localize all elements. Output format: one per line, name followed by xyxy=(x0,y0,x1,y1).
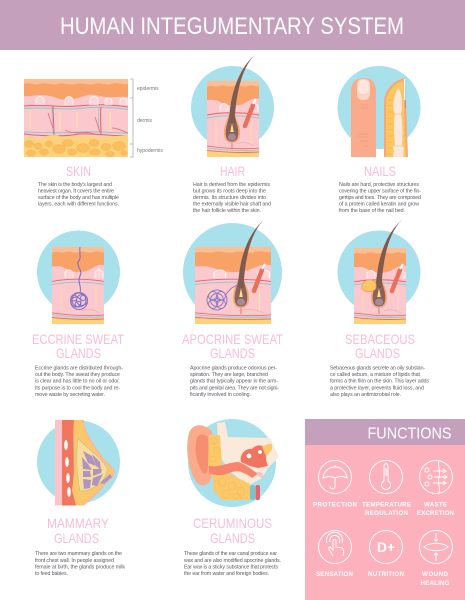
text: mammary glands xyxy=(35,551,125,577)
heading: ceruminous glands xyxy=(193,515,272,546)
text: skin: heaviest organ. It covers the entire xyxy=(38,188,114,194)
text: nails: of a protein called keratin and grow xyxy=(339,202,419,208)
text: ceruminous glands xyxy=(184,551,281,577)
heading: ceruminous glands: GLANDS xyxy=(210,530,255,546)
text: eccrine sweat glands: Eccrine glands are distributed through- xyxy=(35,366,123,372)
text: apocrine sweat glands: ficantly involved in cooling. xyxy=(190,392,251,398)
text: hair: but grows its roots deep into the xyxy=(193,188,266,194)
heading: eccrine sweat glands: GLANDS xyxy=(56,345,101,361)
icon: sensation xyxy=(318,530,352,564)
panel: skin xyxy=(24,79,163,208)
heading: eccrine sweat glands: ECCRINE SWEAT xyxy=(32,331,124,347)
heading: apocrine sweat glands xyxy=(182,331,283,361)
ear illustration xyxy=(187,419,279,507)
text: nails: Nails are hard, protective structures xyxy=(339,182,419,188)
icon: nutrition: D+ xyxy=(377,539,395,555)
label: wound healing xyxy=(420,571,450,587)
text: sebaceous glands: forms a thin film on the skin. This layer adds xyxy=(330,379,429,385)
eccrine gland illustration xyxy=(37,230,120,324)
mammary gland illustration xyxy=(37,420,120,506)
header banner xyxy=(0,0,465,50)
heading: apocrine sweat glands: APOCRINE SWEAT xyxy=(182,331,283,347)
text: nails xyxy=(339,182,421,214)
text: skin: The skin is the body's largest and xyxy=(38,182,112,188)
text: sebaceous glands: a protective layer, prevents fluid loss, and xyxy=(330,386,424,392)
label: protection: PROTECTION xyxy=(313,502,358,508)
text: mammary glands: front chest wall. In people assigned xyxy=(35,558,114,564)
heading: mammary glands xyxy=(47,515,110,546)
text: eccrine sweat glands: move waste by secreting water. xyxy=(35,392,105,398)
text: eccrine sweat glands: Its purpose is to cool the body and re- xyxy=(35,386,120,392)
text: hair: Hair is derived from the epidermis xyxy=(193,182,270,188)
heading: mammary glands: MAMMARY xyxy=(47,515,110,531)
icon: wound healing xyxy=(420,530,452,564)
panel: ceruminous glands xyxy=(184,419,281,577)
label: wound healing: HEALING xyxy=(420,580,450,587)
icon: nutrition xyxy=(370,530,402,564)
text: apocrine sweat glands: glands that typically appear in the arm- xyxy=(190,379,278,385)
heading: mammary glands: GLANDS xyxy=(54,530,99,546)
panel: mammary glands xyxy=(35,420,125,577)
heading: nails: NAILS xyxy=(364,163,396,179)
text: hair: dermis. Its structure divides into xyxy=(193,195,266,201)
text: apocrine sweat glands: spiration. They are large, branched xyxy=(190,372,268,378)
sebaceous gland illustration xyxy=(338,220,420,324)
label: waste excretion: WASTE xyxy=(424,502,447,508)
text: ceruminous glands: wax and are also modified apocrine glands. xyxy=(184,558,281,564)
icon: temperature regulation xyxy=(370,460,402,494)
label: wound healing: WOUND xyxy=(422,571,449,578)
text: skin xyxy=(38,182,119,208)
text: ceruminous glands: Ear wax is a sticky substance that protects xyxy=(184,564,278,570)
functions heading xyxy=(305,419,465,445)
text: hair: the externally visible hair shaft and xyxy=(193,202,271,208)
label: nutrition: NUTRITION xyxy=(368,571,405,578)
text: nails: covering the upper surface of the fin- xyxy=(339,188,421,194)
label: temperature regulation: TEMPERATURE xyxy=(362,502,411,508)
heading: apocrine sweat glands: GLANDS xyxy=(210,345,255,361)
functions heading: FUNCTIONS xyxy=(368,426,452,442)
text: skin: layers, each with different functions. xyxy=(38,202,119,208)
layer brackets and labels: hypodermis xyxy=(137,148,163,154)
hair illustration xyxy=(191,55,274,157)
text: ceruminous glands: These glands of the ear canal produce ear xyxy=(184,551,277,557)
text: mammary glands: There are two mammary glands on the xyxy=(35,551,122,557)
text: hair xyxy=(193,182,271,214)
text: mammary glands: female at birth, the glands produce milk xyxy=(35,564,125,570)
text: eccrine sweat glands xyxy=(35,366,123,398)
text: apocrine sweat glands xyxy=(190,366,279,398)
skin layers illustration xyxy=(24,79,128,157)
panel: eccrine sweat glands xyxy=(32,230,124,398)
panel: hair xyxy=(191,55,274,214)
apocrine gland illustration xyxy=(183,220,282,324)
label: waste excretion: EXCRETION xyxy=(417,510,455,517)
text: nails: from the base of the nail bed. xyxy=(339,208,405,214)
heading: eccrine sweat glands xyxy=(32,331,124,361)
text: hair: the hair follicle within the skin. xyxy=(193,208,261,214)
label: waste excretion xyxy=(417,502,455,517)
text: sebaceous glands: ce called sebum, a mixture of lipids that xyxy=(330,372,421,378)
text: ceruminous glands: the ear from water and foreign bodies. xyxy=(184,571,269,577)
label: temperature regulation xyxy=(362,502,411,517)
panel: apocrine sweat glands xyxy=(182,220,283,398)
heading: sebaceous glands: SEBACEOUS xyxy=(345,331,415,347)
panel: sebaceous glands xyxy=(330,220,429,398)
heading: sebaceous glands xyxy=(345,331,415,361)
layer brackets and labels: dermis xyxy=(137,118,153,124)
text: sebaceous glands: Sebaceous glands secrete an oily substan- xyxy=(330,366,425,372)
nails illustration xyxy=(338,66,420,157)
icon: protection xyxy=(318,460,352,494)
label: sensation: SENSATION xyxy=(316,571,354,578)
heading: sebaceous glands: GLANDS xyxy=(355,345,400,361)
layer brackets and labels: epidermis xyxy=(137,86,159,92)
text: apocrine sweat glands: pits and genital area. They are not signi- xyxy=(190,386,279,392)
text: sebaceous glands xyxy=(330,366,429,398)
text: eccrine sweat glands: is clear and has little to no oil or odor. xyxy=(35,379,120,385)
panel: nails xyxy=(338,66,421,214)
title: HUMAN INTEGUMENTARY SYSTEM xyxy=(60,13,404,40)
text: eccrine sweat glands: out the body. The sweat they produce xyxy=(35,372,120,378)
panel: functions xyxy=(305,419,465,600)
text: nails: gertips and toes. They are composed xyxy=(339,195,421,201)
heading: ceruminous glands: CERUMINOUS xyxy=(193,515,272,531)
text: skin: surface of the body and has multiple xyxy=(38,195,119,201)
layer brackets and labels xyxy=(130,79,163,157)
icon: waste excretion xyxy=(420,460,452,494)
text: apocrine sweat glands: Apocrine glands produce odorous per- xyxy=(190,366,277,372)
label: temperature regulation: REGULATION xyxy=(365,510,409,517)
text: sebaceous glands: also plays an antimicrobial role. xyxy=(330,392,401,398)
text: mammary glands: to feed babies. xyxy=(35,571,68,577)
heading: hair: HAIR xyxy=(220,163,245,179)
heading: skin: SKIN xyxy=(66,163,91,179)
